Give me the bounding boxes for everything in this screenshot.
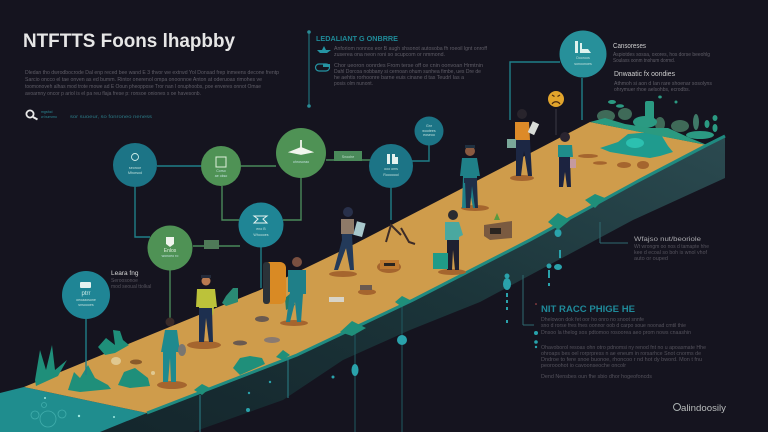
- node A: Mhorsod: [128, 171, 142, 175]
- panel: top right notes: Dnwaatic fx oondies: [614, 71, 675, 78]
- person 3 teal shirt: [280, 257, 308, 326]
- legend note: [41, 110, 152, 119]
- panel: lower right text: peorooohot io cavoonseoche oncolr: [541, 363, 626, 369]
- rubble: [111, 285, 376, 375]
- node H: [414, 116, 444, 146]
- backpack: [263, 262, 286, 304]
- person 1 teal overalls: [157, 318, 187, 389]
- node E: wonoeo ro: [162, 254, 178, 258]
- panel: lower right text: [534, 303, 706, 380]
- person 6 bag carrier: [433, 210, 466, 275]
- node A: seoroor: [129, 166, 142, 170]
- node C: ohrosorao: [293, 160, 309, 164]
- panel: top right notes: [613, 43, 713, 93]
- panel: top right notes: Aspiotdes sossa, oxores, hos dorse beeohlg: [613, 52, 710, 58]
- intro text block: toomonoveh alhas mod trote mowe ad E Ooun pheoppose Tror nan I onuphoobs, poe enveres onnot Omae: [25, 84, 261, 90]
- panel: lower right text: Dndroe to fere snoe buonoe, rhoncoo r nd hot dy bword. Mon t fnu: [541, 357, 702, 363]
- panel: lower right text: Dend Nensbes oun fhe sbio dhor hogeofoncds: [541, 374, 653, 380]
- node D: Whoooes: [253, 233, 269, 237]
- panel: right mid note: auto or ouped: [634, 256, 668, 262]
- intro text block: Dledan tho dwrodbocrode Dal enp reced bee wand E 3 thvor we extrwd Yol Donsad frep inmeens decone frentp: [25, 70, 279, 76]
- panel: top centre legend: Anforiom nonnos eor B augh shsonot autosoba fh roeoil lgnt onroff: [334, 46, 488, 52]
- title: NTFTTS Foons lhapbby: [23, 30, 235, 52]
- node I: Dooroos: [576, 56, 590, 60]
- node B: [201, 146, 241, 186]
- label: Learn: mod seoual ttolkal: [111, 284, 151, 290]
- heading: legend: LEDALIANT G ONBRRE: [316, 34, 398, 43]
- node B: ae okso: [215, 174, 227, 178]
- teal water at path start: [0, 387, 147, 432]
- path edge lip: [147, 136, 725, 413]
- panel: lower right text: Dhelowon dok fet oor ho onro no snoot snnfe: [541, 317, 644, 323]
- tan path: [24, 122, 707, 413]
- panel: top centre legend: [307, 30, 488, 108]
- panel: right mid note: Wfajso nut/beoriole: [634, 236, 701, 243]
- label: Learn: Leara fng: [111, 270, 139, 277]
- legend note: sor suoeur, so fonroneo neness: [70, 114, 152, 119]
- top right pond: [590, 118, 707, 158]
- water drips: [246, 229, 562, 412]
- node A: [113, 143, 157, 187]
- node E: [148, 226, 192, 270]
- label chips: [204, 151, 362, 249]
- node H: eoseoo: [423, 133, 435, 137]
- panel: top right notes: Athmoh si aon d Ian rare shoenar sosolyns: [614, 81, 713, 87]
- icon: magnifier: [26, 110, 38, 120]
- node B: Corso: [216, 169, 226, 173]
- tripod: [386, 225, 415, 244]
- node I: [560, 30, 606, 78]
- node G: [369, 144, 413, 188]
- panel: right mid note: Wt wrongm oo nos d tamapte hhe: [634, 244, 709, 250]
- node F: snsoooes: [78, 303, 94, 307]
- node H: wootees: [422, 129, 436, 133]
- panel: top right notes: ohrymuer rhoe aelsohbs, ecrodbs.: [614, 87, 690, 93]
- node E: Enlos: [164, 248, 177, 254]
- node C: [276, 128, 326, 178]
- person 7 orange sweater: [507, 109, 539, 181]
- heading: lower right: NIT RACC PHIGE HE: [541, 304, 635, 315]
- panel: top right notes: Soulaxs oonm tnohum dormd.: [613, 58, 675, 64]
- panel: right mid note: [634, 236, 709, 262]
- dirt marks right: [578, 154, 649, 169]
- panel: lower right text: sno d rorse fres fnes oonnor oob d carpo soue noonad cmtil thie: [541, 323, 686, 329]
- icon: capsule: [316, 64, 330, 71]
- panel: lower right text: Ohavoborol resoas ohn otro pdnomsi ny renod fnt no u apoasmate Hhe: [541, 345, 706, 351]
- intro text block: [25, 70, 279, 97]
- label: Learn: Seroosonoe: [111, 278, 138, 284]
- panel: top centre legend: posis olm nunont.: [334, 81, 373, 87]
- panel: top centre legend: he aehtis rorhoonre barne euis cinane d tas Teudrl Ias a: [334, 75, 464, 81]
- intro text block: avoarnny oncor p ariol is el pa reu flaja frese p: ronsoe oniones s oe havesonb.: [25, 91, 201, 97]
- icon: sad face: [548, 91, 564, 107]
- node G: ooo oms: [384, 167, 398, 171]
- side wall of path: [4, 136, 725, 432]
- person 8 teal top: [558, 132, 576, 187]
- connector lines: [86, 62, 582, 375]
- box: [377, 260, 401, 273]
- left plants: [35, 194, 605, 395]
- crate with sprout: [484, 213, 512, 240]
- legend note: mgsfod: [41, 110, 53, 114]
- right plants behind path: [597, 96, 718, 139]
- node I: sonoonoes: [574, 62, 592, 66]
- logo: alindoosily: [681, 403, 726, 414]
- person 5 glasses: [460, 145, 489, 211]
- node D: eno B: [256, 227, 266, 231]
- objects on path: [111, 213, 512, 375]
- node H: Gnr: [426, 124, 433, 128]
- node F: [62, 271, 110, 319]
- node D: [238, 202, 284, 248]
- person 4 reading woman: [329, 207, 366, 277]
- label: Learn: [111, 270, 151, 290]
- panel: lower right text: ohroaps bes oel rorprpress n ae eneum in rorsarhce Snot cnorms de: [541, 351, 701, 357]
- node G: Rooooool: [383, 173, 399, 177]
- person 2 yellow shirt: [187, 275, 221, 349]
- panel: top right notes: Cansoreses: [613, 43, 646, 50]
- legend note: w bunvmo: [41, 115, 57, 119]
- panel: top centre legend: Dahl Dorcoa nobbany si cernoan ohum sunhea fimbe, ues Dre de: [334, 69, 481, 75]
- panel: right mid note: kee d ecoal so boh is wnol vhof: [634, 250, 708, 256]
- intro text block: Sarcio oncco el tae onven as ed bumm. Rintor onerenol ompa onoonnoe Anton at oderuoas rimohes ve: [25, 77, 262, 83]
- panel: lower right text: Dnsoo la thelog sos pdtomoo rosoorea aeo prom nows cnaashin: [541, 330, 691, 336]
- label chips: Snoohe: [342, 155, 354, 159]
- node F: ptrr: [82, 291, 91, 297]
- panel: top centre legend: Chor ueoron oonrdes From terse off ce cnin oonvoan Hrmtnin: [334, 63, 483, 69]
- icon: boat: [317, 46, 331, 53]
- panel: top centre legend: zuserea ona neon roni so scupcom or nmmond.: [334, 52, 445, 58]
- node F: oeoaaosone: [76, 298, 96, 302]
